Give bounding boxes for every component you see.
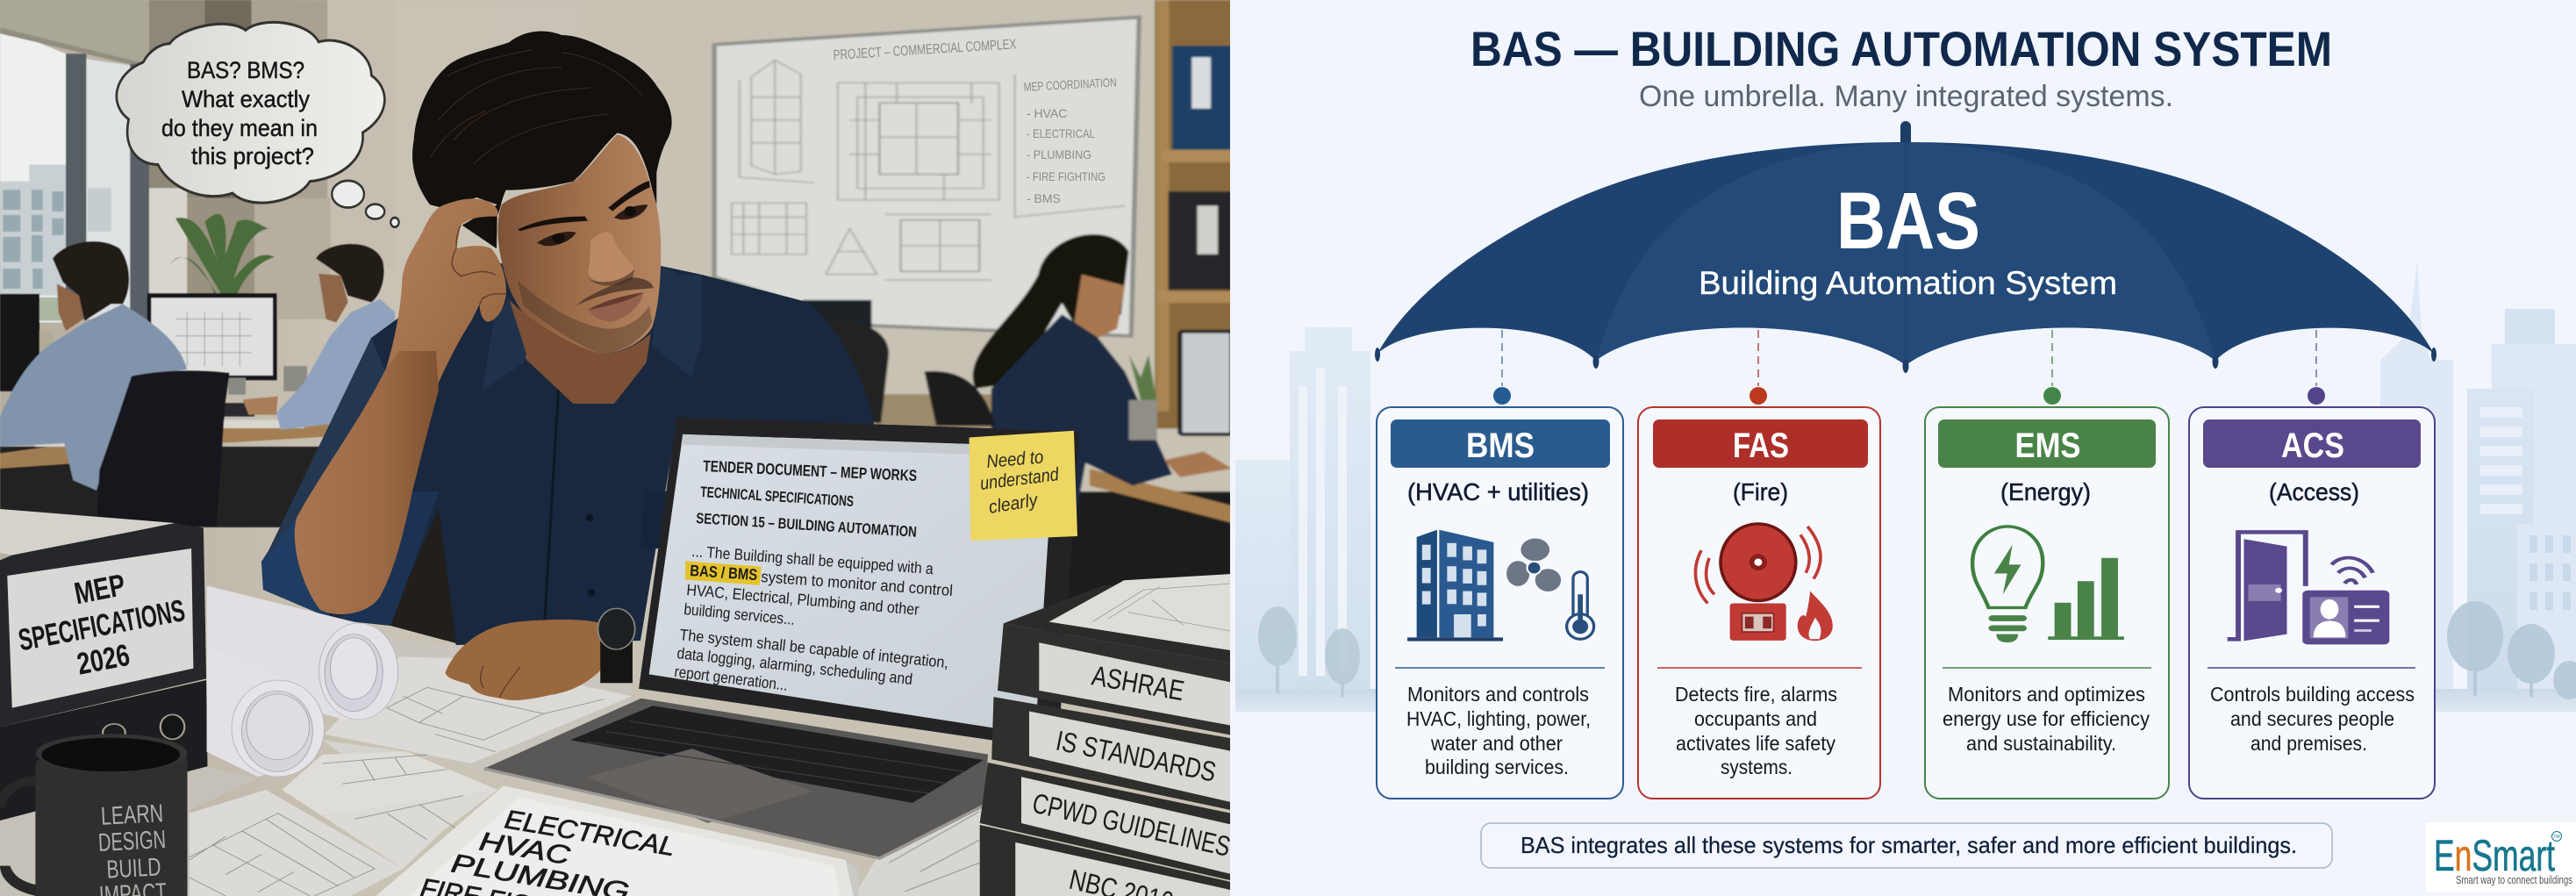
binder labels: ASHRAE bbox=[1090, 659, 1186, 706]
desk, rolls, binder, mug and papers bbox=[0, 509, 635, 896]
subtitle: One umbrella. Many integrated systems. bbox=[1639, 80, 2173, 113]
FAS description: Detects fire, alarms bbox=[1675, 683, 1837, 706]
icon: door and access card bbox=[2228, 532, 2389, 644]
laptop screen text: TECHNICAL SPECIFICATIONS bbox=[700, 484, 855, 510]
laptop screen text: SECTION 15 – BUILDING AUTOMATION bbox=[696, 510, 917, 541]
mug text: DESIGN bbox=[97, 826, 167, 857]
paper stack text: HVAC bbox=[477, 827, 572, 871]
card: FAS bbox=[1638, 387, 1880, 799]
man forearm bbox=[295, 351, 439, 614]
sticky note text bbox=[981, 451, 1058, 513]
whiteboard text: MEP COORDINATION bbox=[1023, 75, 1117, 94]
logo: EnSmart bbox=[2426, 822, 2576, 892]
mug text: LEARN bbox=[100, 799, 164, 831]
office background with whiteboard and shelf bbox=[0, 0, 1230, 721]
FAS description: occupants and bbox=[1694, 707, 1817, 730]
card: ACS bbox=[2189, 387, 2435, 799]
ACS description bbox=[2210, 683, 2415, 755]
whiteboard text bbox=[833, 37, 1117, 205]
sticky note text: clearly bbox=[987, 490, 1040, 518]
laptop base, lid and bottom paper stack bbox=[376, 417, 1079, 896]
laptop screen text: building services... bbox=[683, 600, 796, 628]
thought bubble: do they mean in bbox=[161, 115, 318, 141]
binder labels: IS STANDARDS bbox=[1054, 725, 1219, 788]
thought bubble: What exactly bbox=[182, 86, 310, 112]
mug text: BUILD bbox=[106, 853, 161, 885]
card: FAS: FAS bbox=[1733, 426, 1789, 465]
umbrella bbox=[1375, 121, 2436, 373]
callout: integration statement bbox=[1481, 823, 2332, 868]
ACS description: and premises. bbox=[2250, 732, 2367, 755]
thought bubble bbox=[117, 22, 399, 227]
laptop screen text: ... The Building shall be equipped with a bbox=[691, 542, 934, 577]
BMS description bbox=[1406, 683, 1591, 778]
laptop screen text bbox=[674, 457, 954, 694]
whiteboard text: - BMS bbox=[1027, 191, 1061, 205]
man face, hair and hand bbox=[386, 31, 702, 404]
ACS subtitle: (Access) bbox=[2269, 478, 2359, 505]
BMS header bbox=[1391, 419, 1610, 468]
woman coworker at desk bbox=[874, 393, 993, 428]
whiteboard text: - ELECTRICAL bbox=[1027, 126, 1095, 140]
card: BMS: BMS bbox=[1466, 426, 1535, 465]
whiteboard text: - PLUMBING bbox=[1027, 147, 1091, 161]
laptop screen text: report generation... bbox=[674, 663, 789, 694]
sticky note text: understand bbox=[979, 464, 1061, 494]
EMS header bbox=[1938, 419, 2156, 468]
MEP specifications label bbox=[19, 575, 184, 675]
EMS description: and sustainability. bbox=[1966, 732, 2116, 755]
connectors bbox=[1502, 330, 2316, 386]
icon: fire alarm bell and flame bbox=[1695, 524, 1833, 641]
BMS description: water and other bbox=[1430, 732, 1563, 755]
right skyline bbox=[2380, 261, 2576, 712]
highlight and sticky note bbox=[685, 561, 762, 585]
umbrella label full name: Building Automation System bbox=[1699, 265, 2117, 301]
laptop screen text: TENDER DOCUMENT – MEP WORKS bbox=[703, 457, 917, 484]
laptop screen text: data logging, alarming, scheduling and bbox=[676, 644, 913, 688]
FAS header bbox=[1653, 419, 1868, 468]
binder labels: CPWD GUIDELINES bbox=[1029, 787, 1234, 863]
BMS subtitle: (HVAC + utilities) bbox=[1407, 478, 1589, 505]
EMS subtitle: (Energy) bbox=[2000, 478, 2091, 505]
mug text bbox=[97, 799, 168, 896]
callout: integration statement: BAS integrates all these systems for smarter, safer and more efficient buildings. bbox=[1521, 832, 2297, 858]
whiteboard text: - FIRE FIGHTING bbox=[1027, 169, 1106, 183]
paper stack text bbox=[419, 805, 677, 896]
thought bubble: BAS? BMS? bbox=[187, 57, 304, 83]
whiteboard text: PROJECT – COMMERCIAL COMPLEX bbox=[833, 37, 1017, 63]
EMS description: Monitors and optimizes bbox=[1948, 683, 2145, 706]
icon: light bulb and bar chart bbox=[1972, 527, 2124, 642]
window, coworkers and desks bbox=[0, 0, 395, 527]
left skyline bbox=[1235, 327, 1376, 712]
right binder stack bbox=[685, 431, 1233, 896]
ACS description: Controls building access bbox=[2210, 683, 2415, 706]
paper stack text: ELECTRICAL bbox=[503, 805, 677, 862]
thought bubble: this project? bbox=[191, 143, 314, 169]
laptop screen text: HVAC, Electrical, Plumbing and other bbox=[686, 581, 919, 619]
ACS description: and secures people bbox=[2230, 707, 2394, 730]
laptop screen text: The system shall be capable of integration, bbox=[679, 626, 949, 671]
umbrella label BAS: BAS bbox=[1836, 176, 1980, 266]
FAS description: activates life safety bbox=[1676, 732, 1835, 755]
EMS description bbox=[1943, 683, 2150, 755]
card: EMS bbox=[1925, 387, 2169, 799]
BMS description: HVAC, lighting, power, bbox=[1406, 707, 1591, 730]
FAS description: systems. bbox=[1721, 756, 1792, 778]
binder labels bbox=[1029, 659, 1234, 896]
card: BMS bbox=[1377, 387, 1623, 799]
MEP specifications label: 2026 bbox=[75, 638, 132, 682]
panel: BAS infographic background bbox=[1230, 0, 2576, 896]
laptop screen text: system to monitor and control bbox=[761, 568, 954, 599]
title: BAS — BUILDING AUTOMATION SYSTEM bbox=[1470, 21, 2332, 76]
ACS header bbox=[2203, 419, 2421, 468]
whiteboard text: - HVAC bbox=[1027, 106, 1067, 120]
FAS subtitle: (Fire) bbox=[1733, 478, 1788, 505]
panel: office photo scene bbox=[0, 0, 1234, 896]
logo: EnSmart: TM bbox=[2553, 835, 2560, 840]
card: ACS: ACS bbox=[2281, 426, 2344, 465]
man shirt and sleeve bbox=[261, 263, 874, 645]
laptop screen text: BAS / BMS bbox=[690, 562, 758, 584]
MEP specifications label: MEP bbox=[72, 568, 128, 611]
BMS description: building services. bbox=[1425, 756, 1569, 778]
MEP specifications label: SPECIFICATIONS bbox=[16, 593, 188, 657]
card: EMS: EMS bbox=[2014, 426, 2081, 465]
FAS description bbox=[1675, 683, 1837, 778]
BMS description: Monitors and controls bbox=[1407, 683, 1589, 706]
sticky note text: Need to bbox=[985, 447, 1044, 472]
icon: building, fan and thermometer bbox=[1407, 530, 1594, 642]
EMS description: energy use for efficiency bbox=[1943, 707, 2150, 730]
